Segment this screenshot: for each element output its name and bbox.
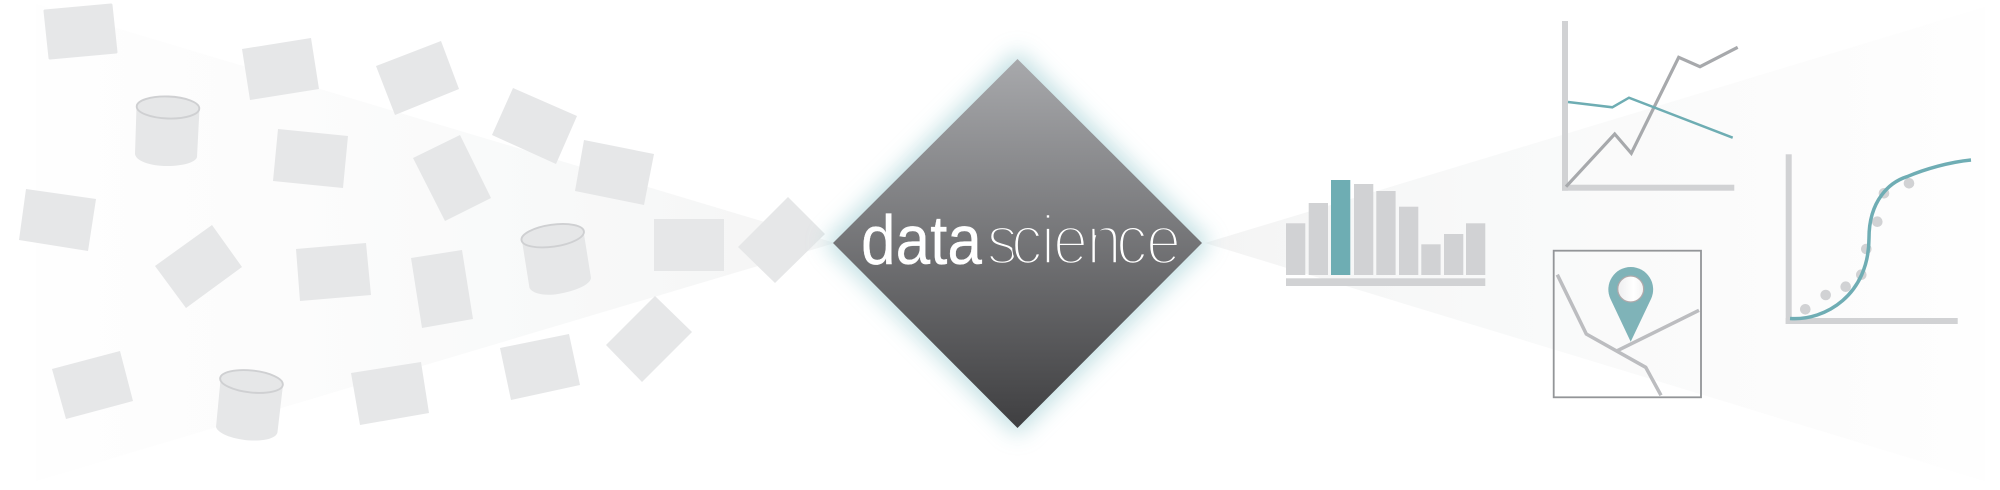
central diamond glow <box>824 50 1211 436</box>
central diamond <box>833 59 1202 428</box>
database cylinder 2 <box>216 367 284 441</box>
scattered raw data blocks <box>19 5 825 425</box>
right funnel <box>1205 7 1985 481</box>
left funnel <box>36 4 835 481</box>
database cylinder 1 <box>135 95 200 166</box>
map with location pin <box>1554 251 1701 397</box>
scatter plot with fitted curve <box>1786 154 1971 324</box>
database cylinder 3 <box>520 220 591 295</box>
line chart <box>1562 21 1738 191</box>
title: data science <box>861 201 1181 280</box>
title: data science: science <box>987 202 1181 280</box>
bar chart <box>1286 180 1485 286</box>
title: data science: data <box>861 201 982 279</box>
